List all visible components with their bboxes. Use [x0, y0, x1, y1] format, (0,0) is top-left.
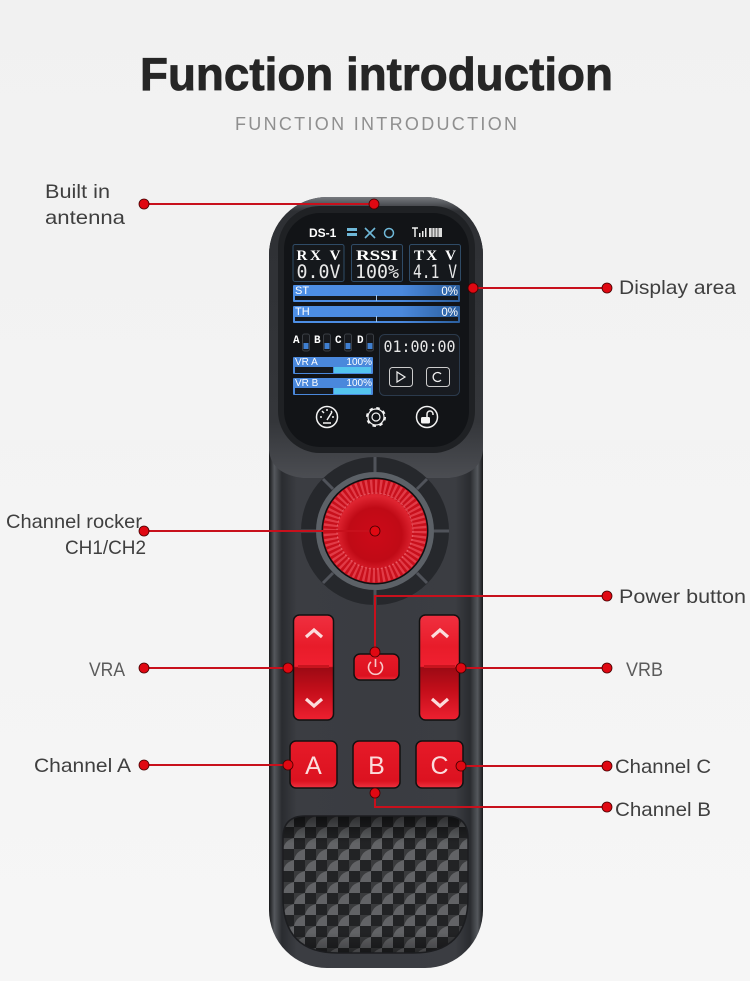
RX V box: RX V: [296, 248, 341, 264]
VR B bar: VR B: [295, 378, 319, 389]
timer panel: [380, 334, 460, 396]
icon: speedometer: [316, 406, 338, 428]
channel indicators A B C D: D: [357, 335, 364, 347]
callout: channel C: Channel C: [615, 756, 711, 778]
icon: unlock: [416, 406, 438, 428]
button A: A: [305, 752, 322, 780]
RSSI box: [352, 244, 402, 283]
VR B bar: [293, 378, 373, 395]
ST bar: [293, 285, 460, 302]
callout: power button: Power button: [619, 586, 746, 608]
TX V box: [410, 244, 460, 283]
callout: channel A: [34, 755, 293, 777]
callout: channel A: Channel A: [34, 755, 131, 777]
power button: [354, 654, 399, 680]
RX V box: 0.0V: [296, 261, 340, 283]
callout: channel B: Channel B: [615, 799, 711, 821]
TX V box: TX V: [414, 248, 456, 264]
channel indicators A B C D: B: [314, 335, 321, 347]
callout: channel rocker: CH1/CH2: [65, 537, 146, 559]
VRB rocker button: [420, 615, 460, 720]
upper casing: [269, 197, 483, 478]
TX V box: 4.1 V: [413, 261, 457, 283]
callout: channel B: [370, 788, 711, 821]
VR A bar: [293, 357, 373, 374]
callout: VRA: [89, 659, 293, 681]
RSSI box: RSSI: [356, 248, 398, 264]
ST bar: ST: [295, 285, 309, 297]
callout: power button: [370, 586, 746, 657]
button C: [416, 741, 463, 788]
callout: channel C: [456, 756, 711, 778]
RX V box: [293, 244, 344, 283]
callout: built in antenna: Built in: [45, 181, 110, 203]
timer panel: 01:00:00: [384, 337, 456, 356]
callout: display area: [468, 277, 736, 299]
callout: VRB: VRB: [626, 659, 663, 681]
remote controller device: [269, 197, 483, 968]
button B: B: [368, 752, 385, 780]
button B: [353, 741, 400, 788]
subtitle: FUNCTION INTRODUCTION: [235, 114, 517, 134]
callout: VRB: [456, 659, 663, 681]
TH bar: 0%: [441, 307, 458, 319]
icon: settings gear: [367, 408, 385, 426]
VR B bar: 100%: [346, 378, 372, 389]
status bar: [309, 226, 442, 240]
ST bar: 0%: [441, 286, 458, 298]
status bar: DS-1: [309, 226, 337, 240]
button A: [290, 741, 337, 788]
device body: [269, 197, 483, 968]
title: Function introduction: [140, 48, 613, 100]
VR A bar: VR A: [295, 357, 318, 368]
channel indicators A B C D: [293, 334, 374, 351]
channel indicators A B C D: A: [293, 335, 300, 347]
channel rocker: [301, 457, 449, 605]
callout: built in antenna: antenna: [45, 207, 125, 229]
channel indicators A B C D: C: [335, 335, 342, 347]
callout: channel rocker: Channel rocker: [6, 511, 143, 533]
TH bar: TH: [295, 306, 310, 318]
display screen: [278, 206, 475, 453]
callout: display area: Display area: [619, 277, 736, 299]
button C: C: [430, 752, 449, 780]
TH bar: [293, 306, 460, 323]
VRA rocker button: [294, 615, 334, 720]
callout: channel rocker: [6, 511, 380, 559]
callout: VRA: VRA: [89, 659, 125, 681]
VR A bar: 100%: [346, 357, 372, 368]
carbon fibre grip: [283, 816, 468, 953]
RSSI box: 100%: [355, 261, 400, 283]
callout: built in antenna: [45, 181, 379, 229]
